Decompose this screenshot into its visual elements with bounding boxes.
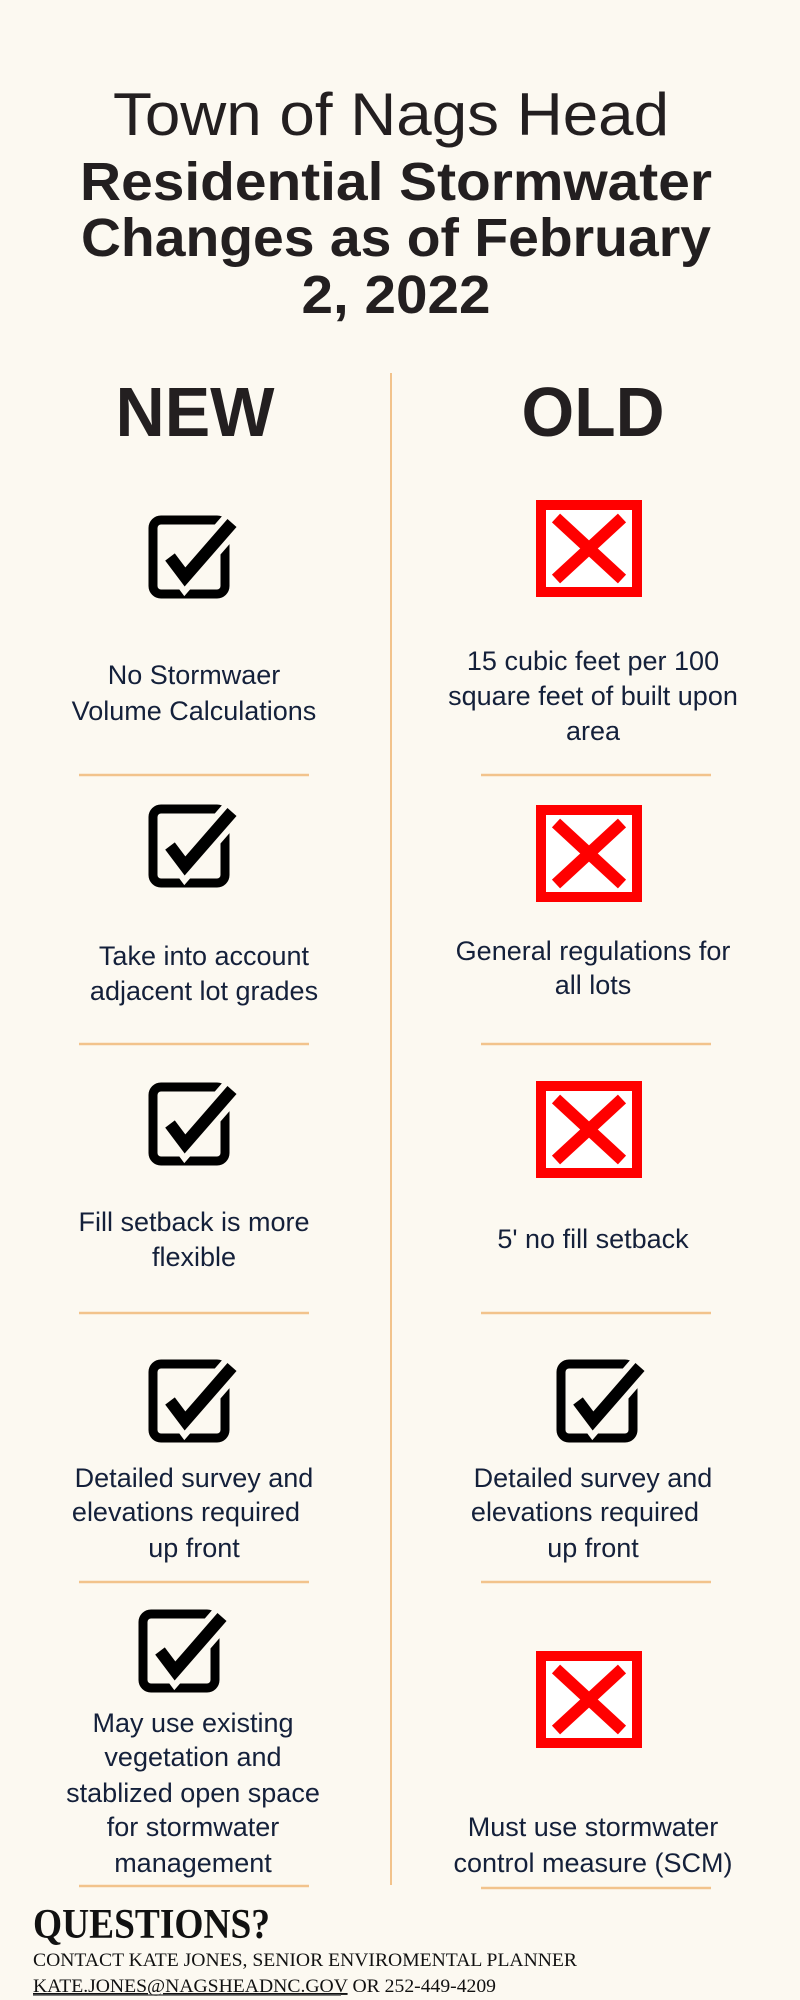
text: old 3: 5' no fill setback	[497, 1224, 689, 1254]
text: new 4: up front	[148, 1533, 240, 1563]
text: old 2: General regulations for	[456, 936, 730, 966]
text: old 4: elevations required	[471, 1497, 699, 1527]
title	[80, 81, 712, 325]
row 2	[90, 809, 730, 1006]
text: new 5: management	[114, 1848, 272, 1878]
text: new 1: No Stormwaer	[108, 660, 280, 690]
footer: questions: QUESTIONS?	[33, 1902, 270, 1948]
icon: checkbox new 4	[153, 1364, 232, 1438]
text: new 5: vegetation and	[104, 1742, 282, 1772]
text: new 1: Volume Calculations	[72, 696, 316, 726]
row 1	[72, 505, 738, 746]
text: new 3: flexible	[152, 1242, 236, 1272]
text: old 5: control measure (SCM)	[453, 1848, 733, 1878]
icon: x box old 2	[541, 810, 637, 897]
icon: checkbox old 4	[561, 1364, 640, 1438]
title: Residential Stormwater	[80, 152, 712, 212]
row 3	[78, 1086, 689, 1272]
text: old 1: 15 cubic feet per 100	[467, 646, 719, 676]
row 5	[66, 1614, 733, 1878]
text: new 2: Take into account	[99, 941, 310, 971]
text: new 5: for stormwater	[107, 1812, 279, 1842]
footer: questions: KATE.JONES@NAGSHEADNC.GOV OR 252-449-4209	[33, 1976, 496, 1997]
text: new 5: stablized open space	[66, 1778, 320, 1808]
icon: checkbox new 1	[153, 520, 232, 594]
text: new 3: Fill setback is more	[78, 1207, 310, 1237]
icon: x box old 5	[541, 1656, 637, 1743]
text: old 4: Detailed survey and	[474, 1463, 712, 1493]
text: new 2: adjacent lot grades	[90, 976, 318, 1006]
text: old 1: area	[566, 716, 621, 746]
icon: x box old 3	[541, 1086, 637, 1173]
title: Town of Nags Head	[113, 81, 669, 148]
icon: checkbox new 2	[153, 809, 232, 883]
text: old 1: square feet of built upon	[448, 681, 738, 711]
footer: questions: CONTACT KATE JONES, SENIOR ENVIROMENTAL PLANNER	[33, 1950, 577, 1971]
text: old 2: all lots	[555, 970, 631, 1000]
icon: checkbox new 3	[153, 1087, 232, 1161]
title: 2, 2022	[302, 265, 490, 325]
title: Changes as of February	[81, 208, 711, 268]
text: old 4: up front	[547, 1533, 639, 1563]
footer: questions	[33, 1902, 577, 1997]
heading: OLD: OLD	[522, 373, 664, 451]
text: new 4: Detailed survey and	[75, 1463, 313, 1493]
row 4	[72, 1364, 712, 1563]
text: new 5: May use existing	[92, 1708, 294, 1738]
text: old 5: Must use stormwater	[468, 1812, 718, 1842]
icon: x box old 1	[541, 505, 637, 592]
heading: NEW: NEW	[116, 373, 274, 451]
icon: checkbox new 5	[143, 1614, 222, 1688]
text: new 4: elevations required	[72, 1497, 300, 1527]
